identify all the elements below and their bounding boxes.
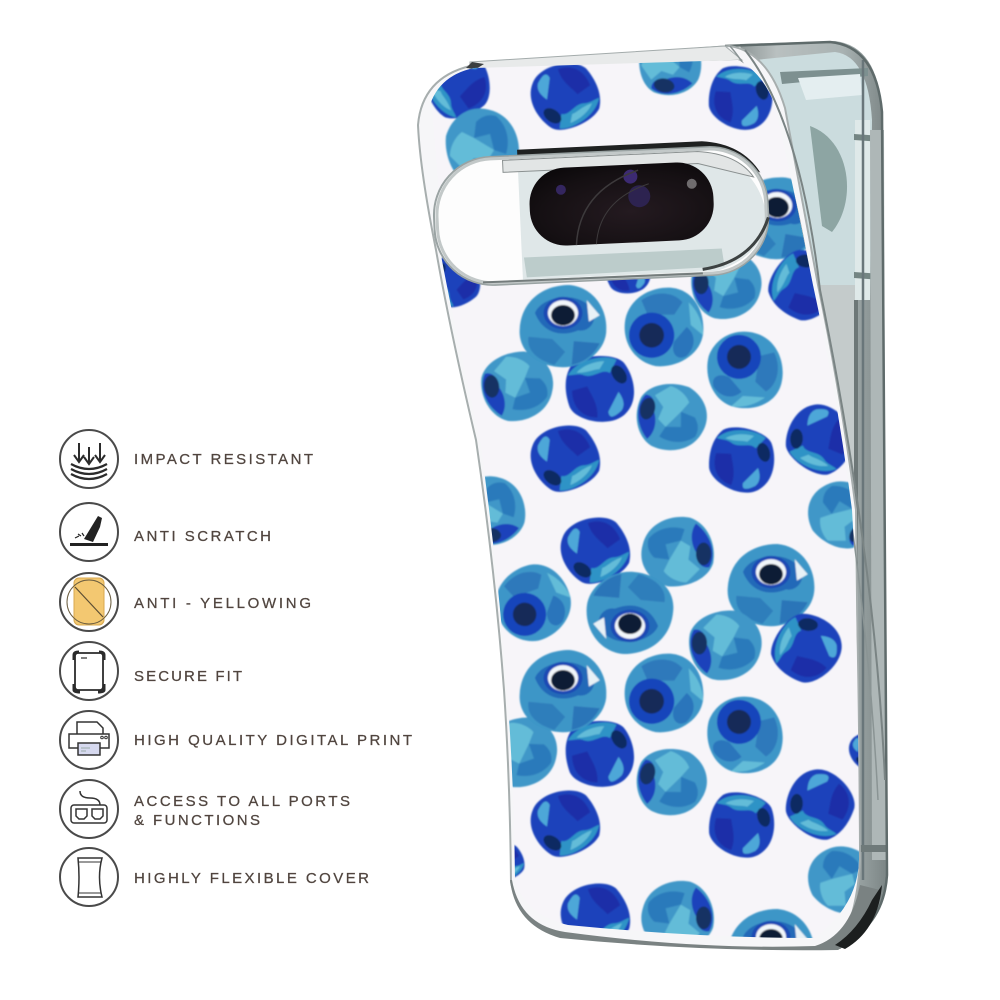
camera rim highlight	[434, 147, 769, 285]
feature: impact resistant	[60, 430, 313, 488]
transparent cover shell	[418, 46, 885, 950]
label: flexible cover: HIGHLY FLEXIBLE COVER	[134, 870, 369, 887]
label: ports: ACCESS TO ALL PORTS	[134, 793, 350, 810]
label: impact resistant: IMPACT RESISTANT	[134, 451, 313, 468]
berries: top of cover	[431, 61, 820, 322]
feature: flexible cover	[60, 848, 369, 906]
label: secure fit: SECURE FIT	[134, 668, 242, 685]
feature: anti yellowing	[60, 573, 311, 631]
phone behind the cover	[725, 41, 887, 948]
feature: anti scratch	[60, 503, 271, 561]
berries: lower cover	[509, 648, 859, 938]
feature: ports	[60, 780, 350, 838]
label: digital print: HIGH QUALITY DIGITAL PRINT	[134, 732, 412, 749]
icon: scratch blade	[60, 503, 118, 561]
icon: phone bumper	[60, 642, 118, 700]
feature: digital print	[60, 711, 412, 769]
icon: yellow phone	[60, 573, 118, 631]
feature list	[60, 430, 412, 906]
icon: ports	[60, 780, 118, 838]
icon: impact arrows	[60, 430, 118, 488]
camera lens	[528, 161, 715, 247]
feature: secure fit	[60, 642, 242, 700]
camera window	[431, 144, 771, 287]
camera top shadow	[517, 139, 760, 184]
camera housing	[518, 153, 769, 280]
label: anti scratch: ANTI SCRATCH	[134, 528, 271, 545]
icon: printer	[60, 711, 118, 769]
icon: flexible cover	[60, 848, 118, 906]
label: anti yellowing: ANTI - YELLOWING	[134, 595, 311, 612]
camera cut-out	[431, 138, 771, 287]
label: functions: & FUNCTIONS	[134, 812, 260, 829]
printed blueberry pattern	[431, 60, 859, 938]
berries: middle of cover	[480, 284, 854, 684]
